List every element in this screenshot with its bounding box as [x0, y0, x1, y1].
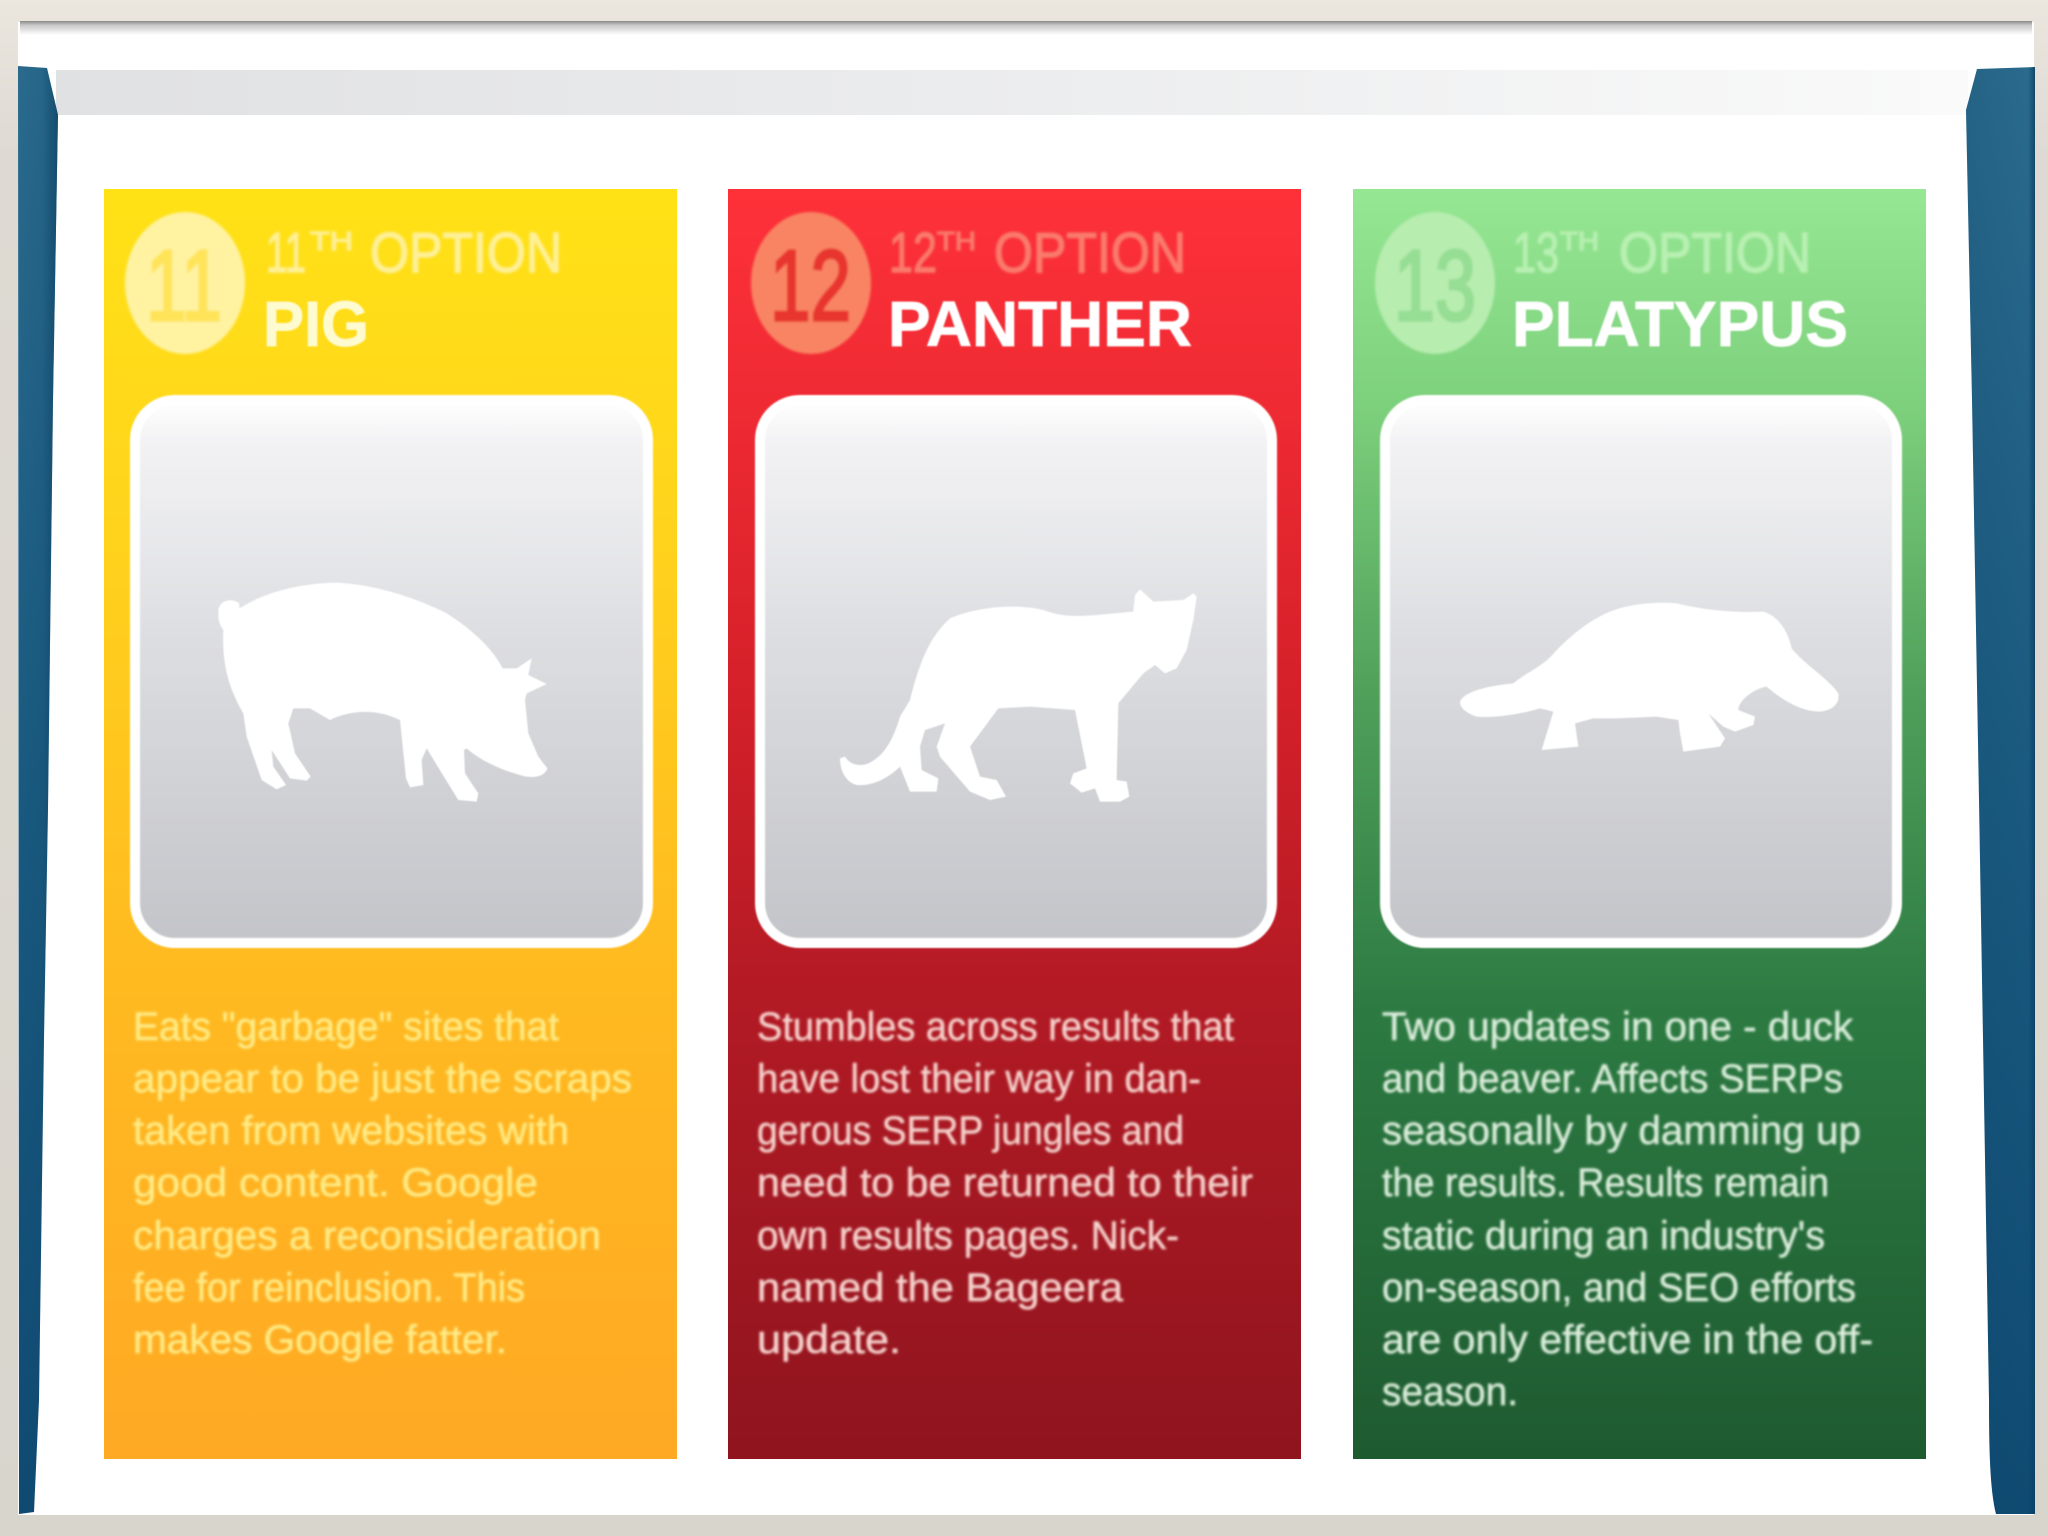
- number badge 11: 11: [146, 230, 222, 342]
- text: platypus description: [1382, 1005, 1873, 1414]
- number badge 12: 12: [770, 230, 851, 342]
- text: pig description: good content. Google: [133, 1161, 538, 1205]
- text: platypus description: on-season, and SEO efforts: [1382, 1266, 1856, 1310]
- text: panther description: gerous SERP jungles and: [757, 1109, 1184, 1153]
- text: panther description: [757, 1005, 1253, 1362]
- image box: platypus: [1385, 400, 1897, 943]
- icon: platypus silhouette: [1460, 603, 1839, 752]
- text: platypus description: seasonally by damming up: [1382, 1109, 1861, 1153]
- heading: platypus: PLATYPUS: [1512, 288, 1848, 360]
- number badge 12: [751, 212, 871, 354]
- heading: 12th option: [889, 221, 1186, 285]
- panel: platypus: [1353, 189, 1926, 1459]
- heading: panther: PANTHER: [888, 288, 1192, 360]
- text: platypus description: are only effective in the off-: [1382, 1318, 1873, 1362]
- top grey band: [56, 70, 1968, 115]
- text: platypus description: static during an industry's: [1382, 1214, 1825, 1258]
- heading: 13th option: 13: [1513, 221, 1559, 285]
- left blue bar: [18, 66, 58, 1514]
- heading: 11th option: OPTION: [370, 221, 562, 285]
- text: panther description: have lost their way in dan-: [757, 1057, 1201, 1101]
- heading: 11th option: 11: [266, 221, 306, 285]
- heading: 13th option: TH: [1560, 226, 1599, 256]
- text: panther description: named the Bageera: [757, 1266, 1124, 1310]
- text: panther description: update.: [757, 1318, 901, 1362]
- text: pig description: fee for reinclusion. This: [133, 1266, 525, 1310]
- heading: 11th option: TH: [310, 226, 353, 256]
- text: panther description: own results pages. Nick-: [757, 1214, 1179, 1258]
- image box: panther: [760, 400, 1272, 943]
- text: pig description: charges a reconsideration: [133, 1214, 601, 1258]
- icon: pig silhouette: [218, 583, 547, 802]
- icon: panther silhouette: [840, 589, 1197, 802]
- text: pig description: [133, 1005, 632, 1362]
- heading: pig: PIG: [263, 288, 369, 360]
- text: pig description: makes Google fatter.: [133, 1318, 507, 1362]
- number badge 13: 13: [1394, 230, 1476, 342]
- text: platypus description: Two updates in one - duck: [1382, 1005, 1854, 1049]
- text: platypus description: season.: [1382, 1370, 1518, 1414]
- text: pig description: taken from websites with: [133, 1109, 569, 1153]
- heading: 13th option: [1513, 221, 1811, 285]
- right blue bar: [1966, 67, 2035, 1514]
- text: platypus description: and beaver. Affects SERPs: [1382, 1057, 1843, 1101]
- text: pig description: appear to be just the scraps: [133, 1057, 632, 1101]
- panel: panther: [728, 189, 1301, 1459]
- number badge 13: [1375, 212, 1495, 354]
- image box: pig: [135, 400, 648, 943]
- heading: 12th option: 12: [889, 221, 937, 285]
- text: pig description: Eats "garbage" sites that: [133, 1005, 559, 1049]
- number badge 11: [125, 212, 245, 354]
- heading: 12th option: OPTION: [994, 221, 1186, 285]
- heading: 12th option: TH: [937, 226, 976, 256]
- panel: pig: [104, 189, 677, 1459]
- text: panther description: need to be returned to their: [757, 1161, 1253, 1205]
- text: panther description: Stumbles across results that: [757, 1005, 1234, 1049]
- heading: 11th option: [266, 221, 562, 285]
- text: platypus description: the results. Results remain: [1382, 1161, 1829, 1205]
- heading: 13th option: OPTION: [1619, 221, 1811, 285]
